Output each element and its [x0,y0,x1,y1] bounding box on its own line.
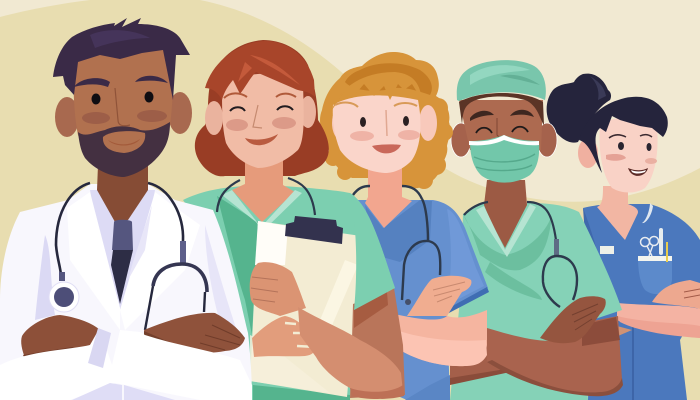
forearm [298,307,403,396]
ears [205,101,223,135]
ears [451,123,471,157]
shirt gap [128,205,152,280]
nurse three: curly blonde hair, blue scrubs [320,52,489,400]
face details [606,135,657,176]
hair front [579,97,668,173]
nurse two: red hair, green scrubs with clipboard [183,40,405,400]
neck [597,186,638,240]
stethoscope [49,183,207,330]
scissors and pens [640,228,668,262]
upper hand [250,262,306,316]
nurse five: right, dark hair, blue uniform [547,74,700,400]
fringe [332,72,422,110]
ears [55,97,79,137]
v collar [476,204,536,257]
face [73,40,173,172]
hand [652,280,700,309]
arm left behind [450,330,512,384]
collar [642,203,653,223]
left hand [407,276,471,316]
surgical cap [457,60,546,101]
torso [583,204,700,400]
face [333,95,420,173]
hair bun [547,74,611,143]
face [459,100,543,150]
neck [232,160,295,222]
crossed arm [617,303,700,338]
beard [78,122,170,177]
sleeve hint [617,326,632,336]
torso [357,200,488,400]
neck [97,165,148,222]
lower hand [252,316,316,357]
face [600,117,658,192]
hair [53,18,190,100]
nurse four: surgical cap and mask, green scrubs [450,60,623,400]
mask [470,135,539,183]
forearm [390,310,487,366]
face details [224,93,296,145]
stethoscope [217,178,315,215]
name badge [600,246,614,254]
right hand [144,313,245,353]
forearm right sleeve arm [487,316,622,395]
collar and lapels [67,192,120,330]
sleeve [350,193,395,310]
brows and smiling eyes [470,110,534,139]
clipboard [250,216,361,397]
upper arm [350,288,405,398]
face details [335,103,420,153]
hair back [195,40,329,176]
face [222,74,304,168]
crossed sleeves [0,330,252,400]
face details [74,76,168,126]
neck [484,180,527,248]
coat [0,184,252,400]
hair front [205,41,315,100]
doctor: white coat [0,18,252,400]
left hand [21,315,99,358]
neck [365,168,412,228]
ears [419,105,437,141]
torso [183,186,395,400]
clip [285,216,343,244]
hair curls [320,52,453,189]
torso [450,203,622,400]
stethoscope [353,186,440,305]
shirt [90,190,155,310]
pocket [638,258,672,294]
ear [578,138,598,168]
tie [111,220,133,304]
stethoscope [464,202,577,307]
hand [540,296,606,343]
